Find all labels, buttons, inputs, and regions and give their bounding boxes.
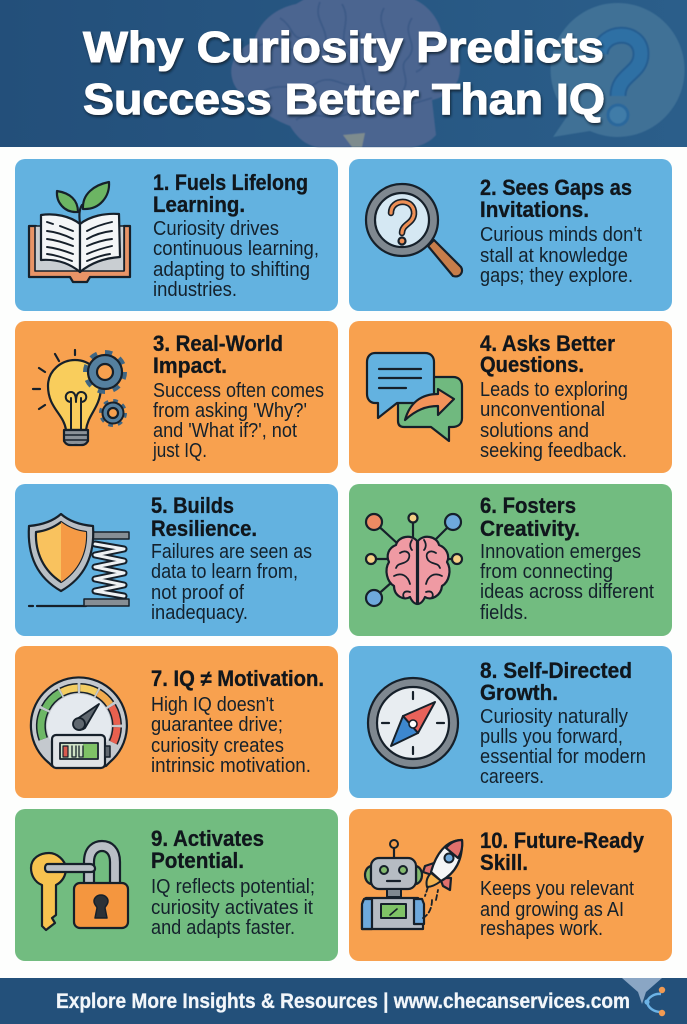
panel: 8. Self-Directed Growth (349, 646, 672, 798)
text: Questions. (480, 352, 584, 377)
text: 6. Fosters (480, 493, 576, 518)
text (480, 828, 645, 940)
text: data to learn from, (151, 561, 298, 583)
panel: 2. Sees Gaps as Invitations (349, 159, 672, 311)
text: 1. Fuels Lifelong (153, 170, 308, 195)
panel: 9. Activates Potential (15, 809, 338, 961)
text: unconventional (480, 399, 605, 421)
text: Innovation emerges (480, 541, 641, 563)
text: and adapts faster. (151, 917, 295, 939)
icon: light bulb with gears (33, 350, 125, 445)
text: curiosity activates it (151, 897, 313, 919)
text: curiosity creates (151, 735, 284, 757)
text: Invitations. (480, 197, 589, 222)
text: Skill. (480, 850, 528, 875)
text: from asking 'Why?' (153, 400, 307, 422)
text: 10. Future-Ready (480, 828, 645, 853)
text: careers. (480, 766, 544, 788)
icon: shield with spring (29, 514, 129, 606)
text: and 'What if?', not (153, 420, 297, 442)
icon: robot with rocket (362, 840, 462, 929)
text: Curiosity drives (153, 218, 279, 240)
text: Curiosity naturally (480, 706, 628, 728)
text: and growing as AI (480, 899, 624, 921)
text (480, 493, 654, 624)
text: inadequacy. (151, 602, 248, 624)
text: not proof of (151, 582, 244, 604)
text: 9. Activates (151, 826, 264, 851)
panel: 10. Future-Ready Skill (349, 809, 672, 961)
text: continuous learning, (153, 238, 319, 260)
text: Impact. (153, 353, 227, 378)
text: Creativity. (480, 516, 580, 541)
text: Potential. (151, 848, 244, 873)
icon: key and padlock (31, 841, 128, 930)
text: IQ reflects potential; (151, 876, 315, 898)
text (151, 493, 312, 624)
footer text: Explore More Insights & Resources | www.checanservices.com (56, 990, 630, 1013)
text: 7. IQ ≠ Motivation. (151, 666, 324, 691)
text: fields. (480, 602, 528, 624)
text: Growth. (480, 680, 558, 705)
text (480, 175, 642, 287)
text: adapting to shifting (153, 259, 310, 281)
title: Why Curiosity Predicts (83, 23, 604, 72)
text: pulls you forward, (480, 726, 623, 748)
text: just IQ. (152, 440, 207, 462)
text: High IQ doesn't (151, 694, 274, 716)
text (151, 666, 324, 777)
watermark: question bubble (551, 3, 685, 137)
text (480, 331, 628, 462)
text: Resilience. (151, 516, 257, 541)
text: Learning. (153, 192, 245, 217)
icon: brain with network nodes (366, 514, 462, 606)
text: guarantee drive; (151, 714, 283, 736)
watermark: brain (231, 0, 460, 147)
footer bar (0, 978, 687, 1024)
panel: 1. Fuels Lifelong Learning (15, 159, 338, 311)
text: seeking feedback. (480, 440, 627, 462)
icon: speedometer gauge with battery (31, 677, 127, 768)
text: ideas across different (480, 581, 654, 603)
panel: 7. IQ ≠ Motivation (15, 646, 338, 798)
header banner (0, 0, 687, 147)
text: industries. (153, 279, 237, 301)
text (153, 170, 319, 301)
text: gaps; they explore. (480, 265, 633, 287)
icon: magnifying glass with question mark (366, 184, 462, 276)
text (152, 331, 324, 462)
text: 8. Self-Directed (480, 658, 632, 683)
text: Success often comes (153, 380, 324, 402)
text: solutions and (480, 420, 589, 442)
text: Curious minds don't (480, 224, 642, 246)
text: intrinsic motivation. (151, 755, 311, 777)
icon: compass (368, 678, 458, 768)
text: Failures are seen as (151, 541, 312, 563)
title: Success Better Than IQ (83, 75, 605, 124)
panel: 5. Builds Resilience (15, 484, 338, 636)
logo with notch (622, 978, 665, 1016)
text: reshapes work. (480, 918, 603, 940)
text: stall at knowledge (480, 245, 628, 267)
text: Leads to exploring (480, 379, 628, 401)
text (480, 658, 646, 788)
panel: 4. Asks Better Questions (349, 321, 672, 473)
text: 2. Sees Gaps as (480, 175, 632, 200)
panel: 3. Real-World Impact (15, 321, 338, 473)
panel: 6. Fosters Creativity (349, 484, 672, 636)
text: 4. Asks Better (480, 331, 615, 356)
text: essential for modern (480, 746, 646, 768)
text: 5. Builds (151, 493, 234, 518)
icon: chat bubbles with arrow (367, 353, 462, 441)
title (83, 23, 605, 124)
text (151, 826, 315, 939)
text: Keeps you relevant (480, 878, 634, 900)
text: from connecting (480, 561, 613, 583)
text: 3. Real-World (153, 331, 283, 356)
icon: open book with sprout (29, 182, 130, 282)
